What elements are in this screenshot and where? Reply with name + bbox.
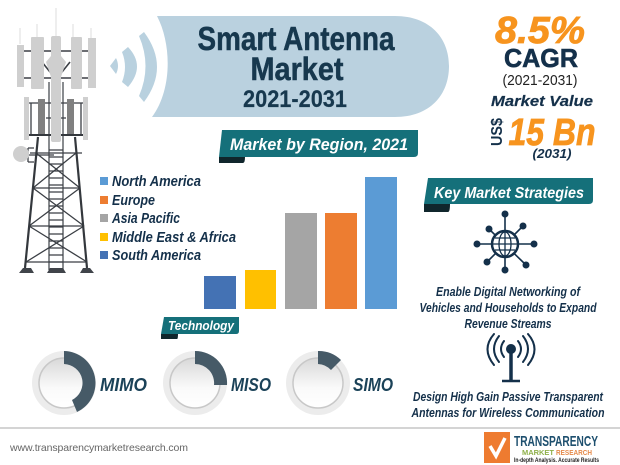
heading: key market strategies: Key Market Strategies: [434, 185, 584, 202]
title text: 2021-2031: [243, 86, 347, 113]
heading: key market strategies: [424, 178, 593, 212]
stat: market value label: Market Value: [491, 93, 593, 110]
text: strategy one: [420, 285, 597, 331]
icon: digital network globe: [474, 210, 538, 274]
donut: SIMO: SIMO: [353, 374, 394, 395]
title text: [198, 20, 395, 113]
footer url: www.transparencymarketresearch.com: [9, 442, 188, 454]
text: strategy two: [411, 390, 605, 420]
icon: wireless signal arcs: [110, 32, 157, 102]
heading: market by region: [219, 130, 418, 163]
stat: market value year: (2031): [532, 146, 572, 161]
bar chart: market by region: [204, 177, 397, 309]
legend: regions: North America: [112, 174, 201, 190]
legend: regions: Middle East & Africa: [112, 230, 236, 246]
heading: technology: Technology: [168, 318, 235, 333]
donut: MISO: [163, 351, 272, 415]
legend: regions: Europe: [112, 193, 155, 209]
stat: currency: US$: [489, 118, 506, 146]
title text: Market: [250, 51, 344, 87]
title text: Smart Antenna: [198, 20, 395, 57]
CAGR and market value stats: [489, 10, 596, 161]
text: strategy one: Enable Digital Networking of: [436, 285, 582, 299]
logo: Transparency Market Research: MARKET: [522, 448, 554, 457]
legend: regions: Asia Pacific: [111, 211, 180, 227]
donut: MIMO: [32, 351, 148, 415]
logo: Transparency Market Research: [484, 432, 599, 464]
logo icon: [484, 432, 510, 463]
stat: CAGR label: CAGR: [504, 43, 578, 73]
stat: CAGR period: (2021-2031): [502, 72, 578, 89]
icon: telecom tower: [13, 8, 96, 273]
stat: CAGR value: 8.5%: [495, 10, 585, 52]
stat: market value amount: 15 Bn: [508, 112, 596, 154]
icon: antenna broadcast: [488, 334, 534, 381]
logo: Transparency Market Research: RESEARCH: [556, 448, 592, 457]
heading: market by region: Market by Region, 2021: [230, 136, 408, 154]
legend: regions: [100, 174, 236, 264]
donut: MIMO: MIMO: [100, 374, 148, 395]
legend: regions: South America: [112, 248, 201, 264]
title banner: [152, 16, 449, 117]
donut: MISO: MISO: [231, 374, 272, 395]
text: strategy one: Revenue Streams: [464, 317, 552, 331]
heading: technology: [161, 317, 239, 339]
donut: SIMO: [286, 351, 394, 415]
